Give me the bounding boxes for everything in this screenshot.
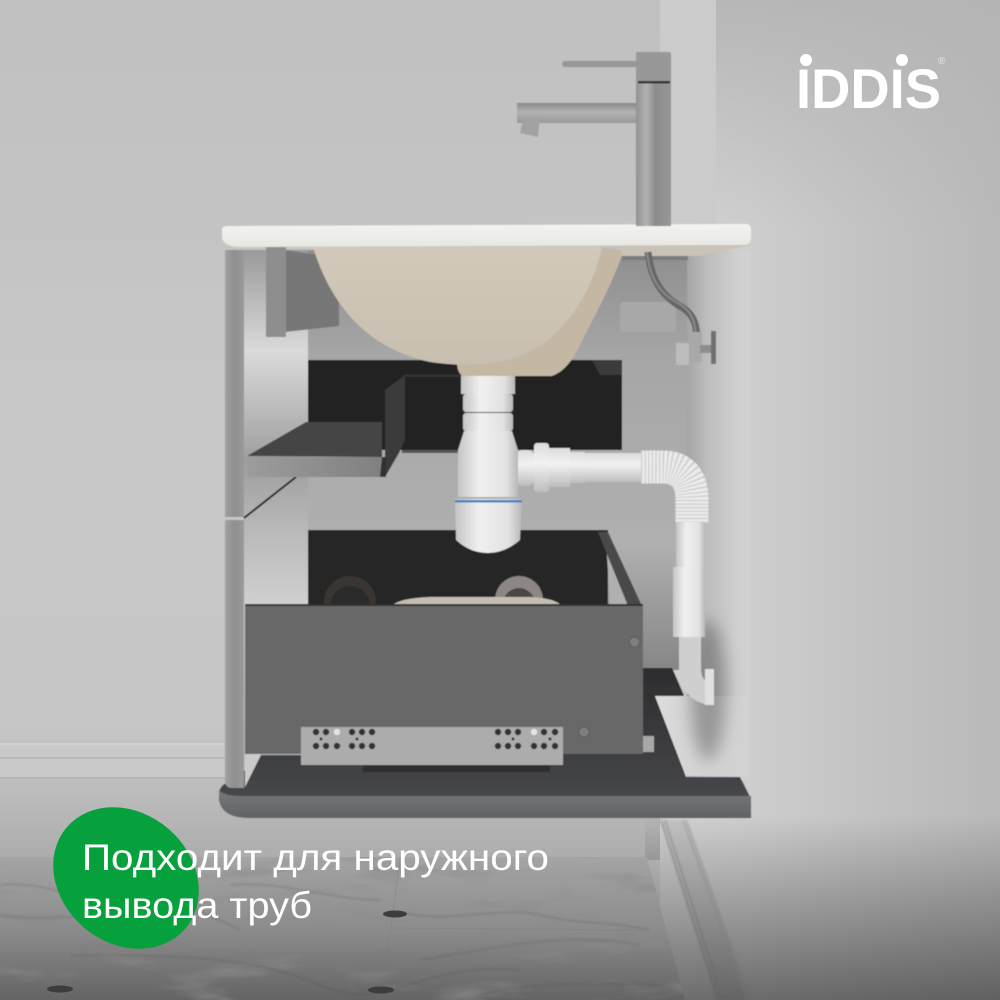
screw upper <box>630 637 640 647</box>
shelf rail strip <box>402 450 460 453</box>
caption: вывода труб <box>82 885 312 926</box>
countertop underside <box>620 245 750 256</box>
faucet <box>517 52 671 226</box>
stored round item right <box>495 576 543 624</box>
faucet cap slot <box>638 81 670 84</box>
siphon blue seal <box>455 500 522 502</box>
faucet body <box>636 80 671 226</box>
pipe shadow on wall <box>690 620 726 760</box>
countertop <box>222 224 751 247</box>
drawer runner end clip <box>643 736 654 752</box>
logo: IDDIS <box>796 57 941 120</box>
perforated rail plate <box>301 727 563 765</box>
corrugated elbow <box>641 467 692 523</box>
skirting band on left wall <box>0 744 226 779</box>
base shelf top <box>219 668 750 797</box>
floor drain dots <box>47 910 407 994</box>
drawer front <box>245 604 643 754</box>
right interior wall <box>687 250 750 780</box>
vanity unit <box>219 224 751 818</box>
horizontal waste pipe <box>515 443 641 492</box>
supply hose <box>647 252 697 340</box>
door gap line <box>244 477 296 518</box>
screw lower <box>579 727 589 737</box>
upper pull-out shelf <box>247 375 405 477</box>
left side panel <box>244 250 308 755</box>
drain plug bracket <box>266 247 339 337</box>
caption <box>82 837 549 926</box>
column foot highlight <box>245 753 262 787</box>
stored round item left <box>324 576 376 628</box>
stored dish <box>391 597 562 606</box>
green accent ellipse <box>24 778 228 978</box>
siphon <box>455 376 522 553</box>
basin <box>313 247 624 376</box>
base shelf cut-out <box>655 696 750 776</box>
skirting board on right wall <box>660 820 750 1000</box>
wall darkening lower right <box>645 815 1000 1000</box>
back panel <box>300 250 688 670</box>
left cabinet column upper <box>225 250 244 517</box>
upper black rear panel <box>308 360 622 450</box>
rail under counter <box>622 256 688 260</box>
registered mark: ® <box>938 56 946 67</box>
marble floor <box>0 857 690 1000</box>
angle valve <box>676 331 716 365</box>
lower drawer interior <box>308 530 642 628</box>
faucet aerator <box>520 118 540 137</box>
left cabinet column lower <box>225 520 244 788</box>
base shelf front edge <box>219 790 751 818</box>
angle valve box <box>620 302 676 332</box>
caption: Подходит для наружного <box>82 837 549 878</box>
faucet lever <box>562 61 640 67</box>
vertical waste pipe <box>673 522 714 705</box>
faucet spout <box>517 103 639 123</box>
under-rail shadow bar <box>363 765 550 772</box>
faucet cap <box>636 52 671 81</box>
